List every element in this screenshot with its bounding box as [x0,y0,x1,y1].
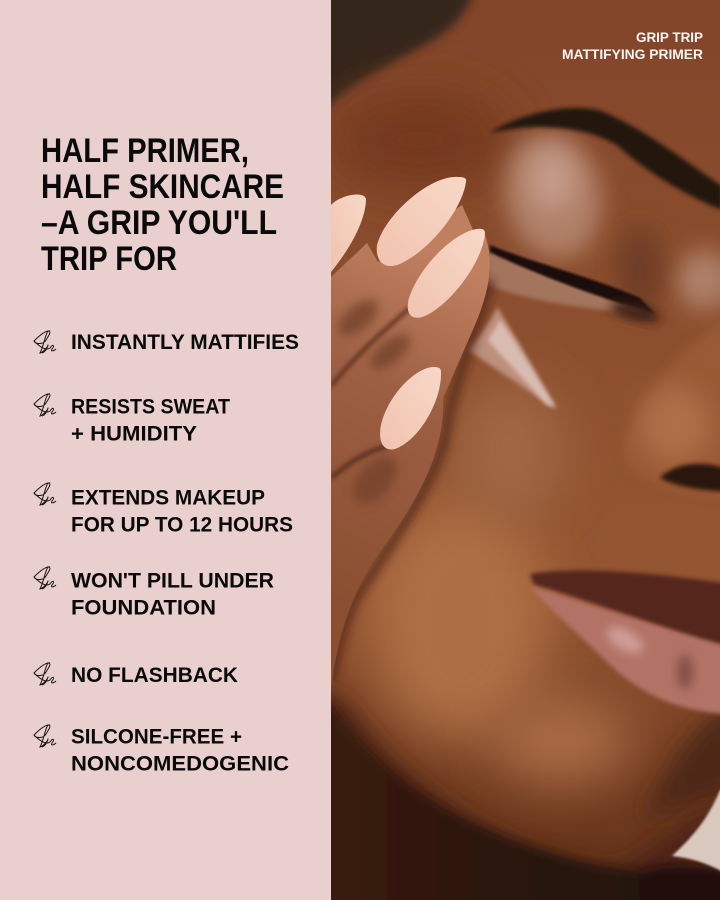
hand silhouette [331,205,490,688]
nail 4 [380,367,441,449]
product label: MATTIFYING PRIMER [562,47,703,62]
benefit: instantly mattifies: INSTANTLY MATTIFIES [71,331,299,354]
nail 2 [377,177,466,266]
nail 1 [331,195,366,272]
heading: HALF PRIMER, [41,132,249,170]
product label: GRIP TRIP [636,30,703,45]
benefit: won't pill: FOUNDATION [71,596,216,620]
primer swipe [468,307,556,408]
background corner [672,790,720,873]
brow bone highlight [493,122,613,268]
heading: –A GRIP YOU'LL [41,204,277,242]
nostril [660,464,720,492]
photo: woman applying primer [290,0,720,900]
jaw shadow [642,712,720,820]
eyelashes [490,245,655,314]
heading: TRIP FOR [41,240,177,278]
eye socket shadow [616,226,664,314]
benefit: extends makeup [34,483,293,536]
benefit: silicone-free: SILCONE-FREE + [71,726,242,748]
heading [41,132,284,278]
benefit: won't pill [34,567,274,620]
benefit: silicone-free [34,725,289,776]
neck [300,705,720,900]
hand shadow on cheek [332,280,491,680]
forehead shading [330,90,510,190]
benefit: resists sweat + humidity [34,394,230,446]
nose [632,326,720,468]
heading: HALF SKINCARE [41,168,284,206]
benefit: extends makeup: FOR UP TO 12 HOURS [71,514,293,536]
lips [530,570,720,714]
benefit: resists sweat + humidity: RESISTS SWEAT [71,396,230,418]
lower eyelid [488,252,626,312]
knuckles [335,296,382,339]
benefit: won't pill: WON'T PILL UNDER [71,570,274,592]
benefit: extends makeup: EXTENDS MAKEUP [71,486,265,510]
hand and fingers [331,176,500,688]
benefit: silicone-free: NONCOMEDOGENIC [71,752,289,776]
cheek highlight [370,500,550,740]
product label [562,30,703,62]
benefit: resists sweat + humidity: + HUMIDITY [71,422,197,446]
hair at the temple [331,0,477,110]
benefit: no flashback: NO FLASHBACK [71,664,238,687]
crease between fingers [331,306,412,386]
nail 3 [408,229,485,318]
eyebrow [490,108,720,210]
panel: pink benefits column [0,0,331,900]
